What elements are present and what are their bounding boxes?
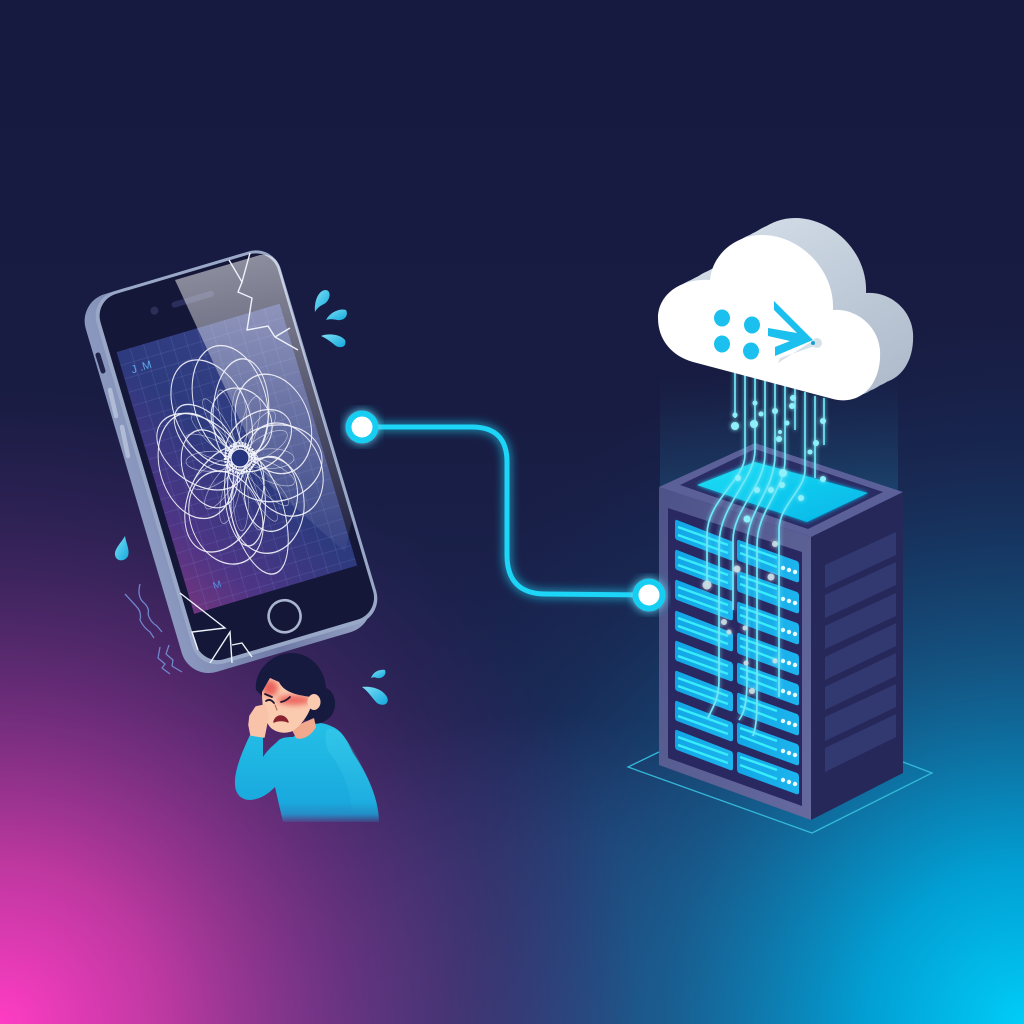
- data particles over drives: [702, 541, 778, 694]
- drive rows left column: [675, 520, 733, 770]
- hair back: [256, 653, 335, 724]
- floor outline under server: [628, 752, 932, 833]
- neck: [291, 718, 316, 739]
- cloud: [658, 218, 913, 400]
- server top: [659, 443, 903, 537]
- server right side: [811, 492, 903, 820]
- ear: [308, 694, 320, 710]
- cloud extruded depth: [666, 218, 913, 396]
- connector line between phone and server: [362, 427, 648, 595]
- light column under cloud: [660, 375, 898, 500]
- phone connector node: [348, 414, 376, 440]
- phone body: [78, 244, 385, 680]
- server tower: [659, 443, 903, 820]
- eyes, brow, nose: [265, 694, 290, 710]
- hand: [249, 705, 268, 737]
- screen glare: [175, 255, 352, 552]
- phone: [78, 244, 385, 680]
- scribble centre ring: [225, 443, 255, 473]
- cloud front: [658, 235, 880, 400]
- sweater: [235, 723, 379, 822]
- tangled scribble on screen: [123, 313, 361, 598]
- phone screen: J .M: [130, 359, 153, 376]
- screen cracks bottom left: [180, 593, 252, 663]
- data streams from cloud to server: [702, 370, 826, 736]
- worried person: [235, 653, 379, 822]
- sweat drops near phone: [315, 290, 347, 347]
- server connector node: [636, 582, 662, 608]
- sweat drops near person: [362, 670, 388, 705]
- server front inset: [668, 508, 802, 806]
- server glowing top panel: [697, 462, 868, 522]
- falling data particles: [731, 395, 826, 522]
- face: [262, 678, 312, 733]
- mouth: [274, 716, 288, 722]
- server front frame: [659, 487, 811, 820]
- drive rows right column: [737, 540, 799, 794]
- side buttons: [98, 355, 128, 456]
- speaker and camera: [149, 289, 215, 316]
- cloud arrow: [768, 301, 822, 363]
- drop left of phone: [115, 536, 129, 560]
- home button: [265, 596, 304, 636]
- vibration squiggles: [125, 584, 182, 674]
- screen cracks top right: [229, 253, 298, 350]
- sweater sleeve shading: [326, 729, 378, 815]
- phone screen: [117, 304, 357, 614]
- server side vents: [825, 532, 896, 772]
- cloud dots: [714, 310, 760, 360]
- phone screen: M: [212, 579, 223, 592]
